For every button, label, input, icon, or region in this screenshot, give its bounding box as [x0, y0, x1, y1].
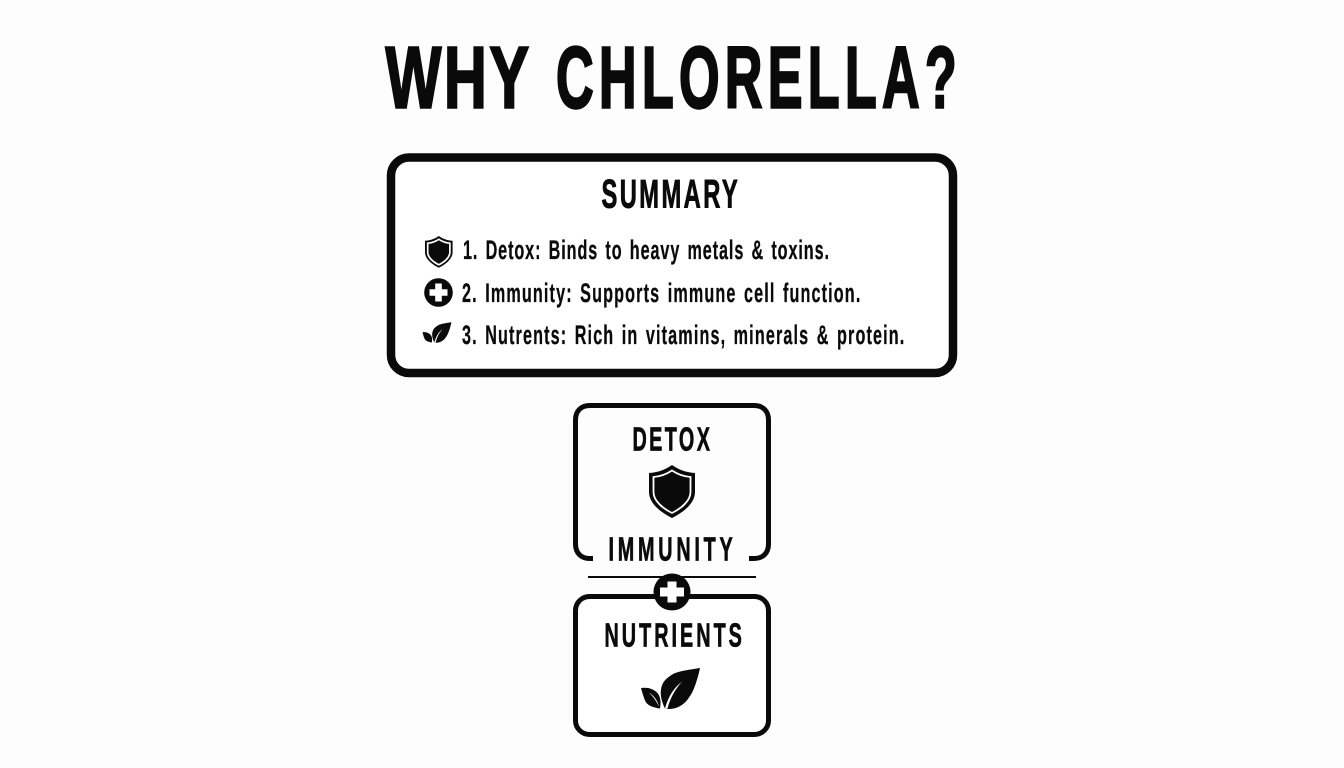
icon: shield [649, 465, 695, 518]
icon: leaf [641, 668, 700, 709]
panel: detox [576, 406, 768, 558]
title [386, 29, 957, 127]
panel: summary [391, 158, 953, 373]
summary item 1: 1. Detox: Binds to heavy metals & toxins. [463, 235, 829, 265]
detox label: DETOX [632, 420, 710, 458]
icon: plus badge [654, 574, 690, 610]
icon: small plus [424, 278, 453, 307]
icon: small leaf [422, 322, 451, 343]
summary heading: SUMMARY [602, 172, 738, 216]
icon: small shield [425, 236, 453, 268]
title: WHY [386, 29, 529, 126]
summary item 2: 2. Immunity: Supports immune cell function. [462, 278, 860, 308]
immunity label: IMMUNITY [608, 530, 733, 568]
divider line [588, 576, 756, 578]
summary item 3: 3. Nutrents: Rich in vitamins, minerals & protein. [462, 320, 904, 350]
panel: nutrients [576, 596, 768, 734]
nutrients label: NUTRIENTS [604, 616, 742, 654]
title: CHLORELLA? [556, 30, 957, 127]
